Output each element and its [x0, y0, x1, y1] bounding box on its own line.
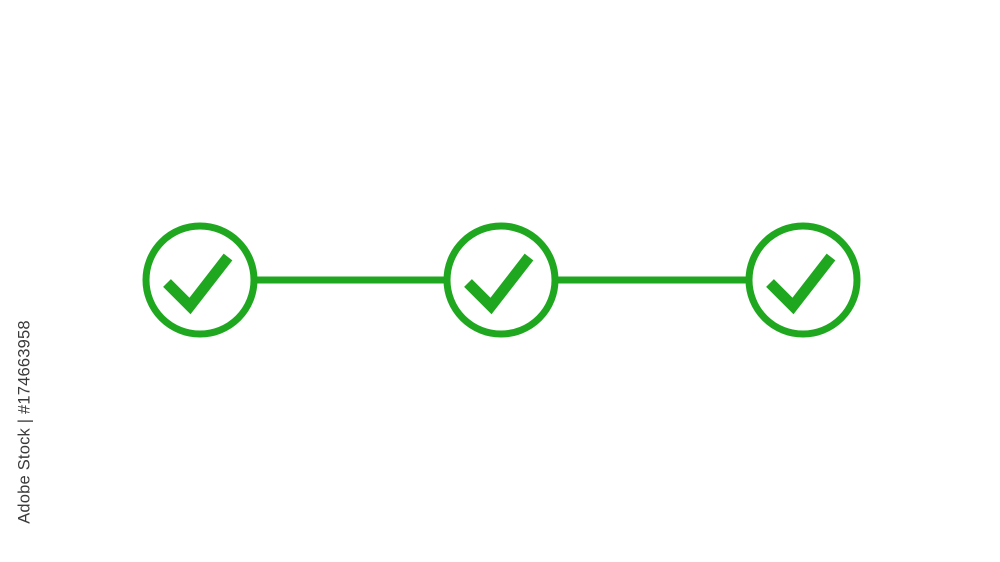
watermark text: Adobe Stock | #174663958: [16, 320, 34, 524]
connector line: [256, 276, 746, 284]
step 2 check circle: [447, 226, 555, 334]
step 3 check circle: [749, 226, 857, 334]
step 1 check circle: [146, 226, 254, 334]
